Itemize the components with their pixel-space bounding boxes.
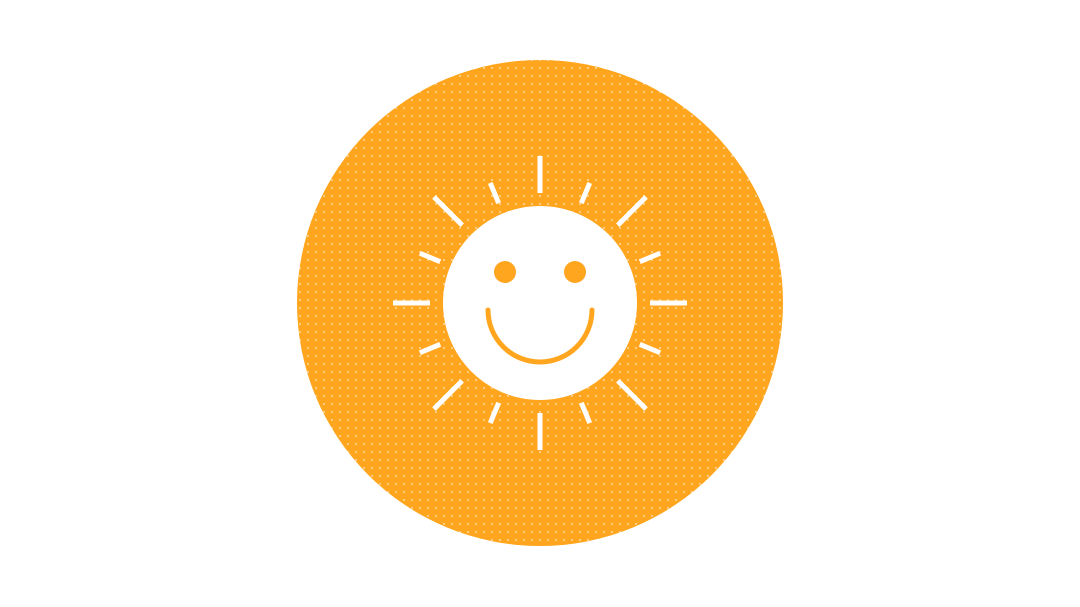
icon: sun rays (393, 156, 687, 450)
icon: orange dotted circle background (297, 60, 783, 546)
icon: sun face (443, 206, 637, 400)
